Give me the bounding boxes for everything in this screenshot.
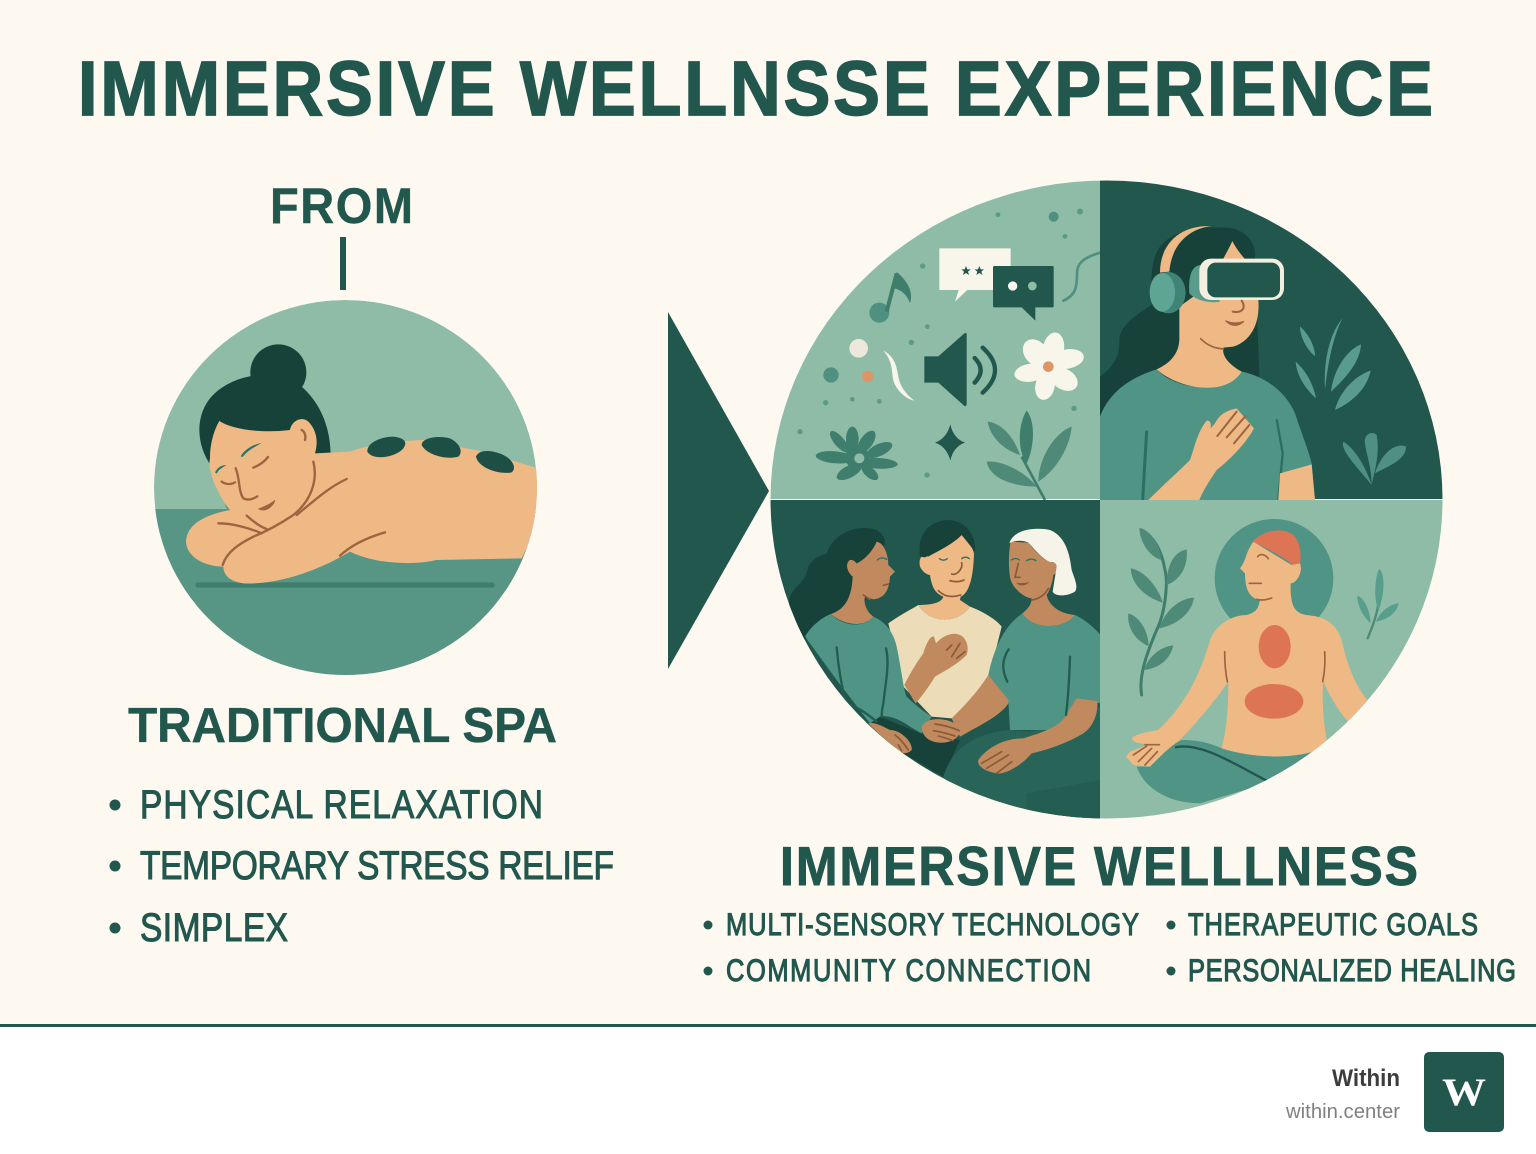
illustration: immersive wellness quadrant circle <box>770 180 1445 820</box>
list: immersive wellness traits: PERSONALIZED HEALING <box>1188 953 1516 989</box>
quadrant: vr headset woman <box>1100 180 1445 500</box>
connector line <box>340 237 346 290</box>
footer band <box>0 1024 1536 1154</box>
list: immersive wellness traits <box>704 907 1516 989</box>
list: immersive wellness traits: MULTI-SENSORY TECHNOLOGY <box>726 907 1139 943</box>
footer brand text: Within <box>1332 1065 1400 1092</box>
quadrant: meditating body with energy centers <box>1100 500 1445 820</box>
list: traditional spa traits: PHYSICAL RELAXATION <box>140 782 543 827</box>
heading: from: FROM <box>270 179 413 234</box>
title: IMMERSIVE WELLNSSE EXPERIENCE <box>78 45 1433 132</box>
list: immersive wellness traits: COMMUNITY CONNECTION <box>726 953 1091 989</box>
quadrant: multi-sensory elements <box>770 180 1100 500</box>
quadrant: community of three people <box>770 500 1102 820</box>
list: immersive wellness traits: THERAPEUTIC GOALS <box>1188 907 1478 943</box>
footer brand text: within.center <box>1285 1101 1400 1123</box>
list: traditional spa traits: SIMPLEX <box>140 905 288 950</box>
list: traditional spa traits: TEMPORARY STRESS RELIEF <box>140 843 614 888</box>
logo: W <box>1442 1071 1486 1114</box>
heading: immersive wellness: IMMERSIVE WELLLNESS <box>780 836 1418 898</box>
heading: traditional spa: TRADITIONAL SPA <box>128 699 557 753</box>
footer brand text <box>1285 1065 1400 1123</box>
illustration: traditional spa massage <box>150 300 540 682</box>
list: traditional spa traits <box>110 782 614 950</box>
logo <box>1424 1052 1504 1132</box>
arrow <box>668 312 769 669</box>
